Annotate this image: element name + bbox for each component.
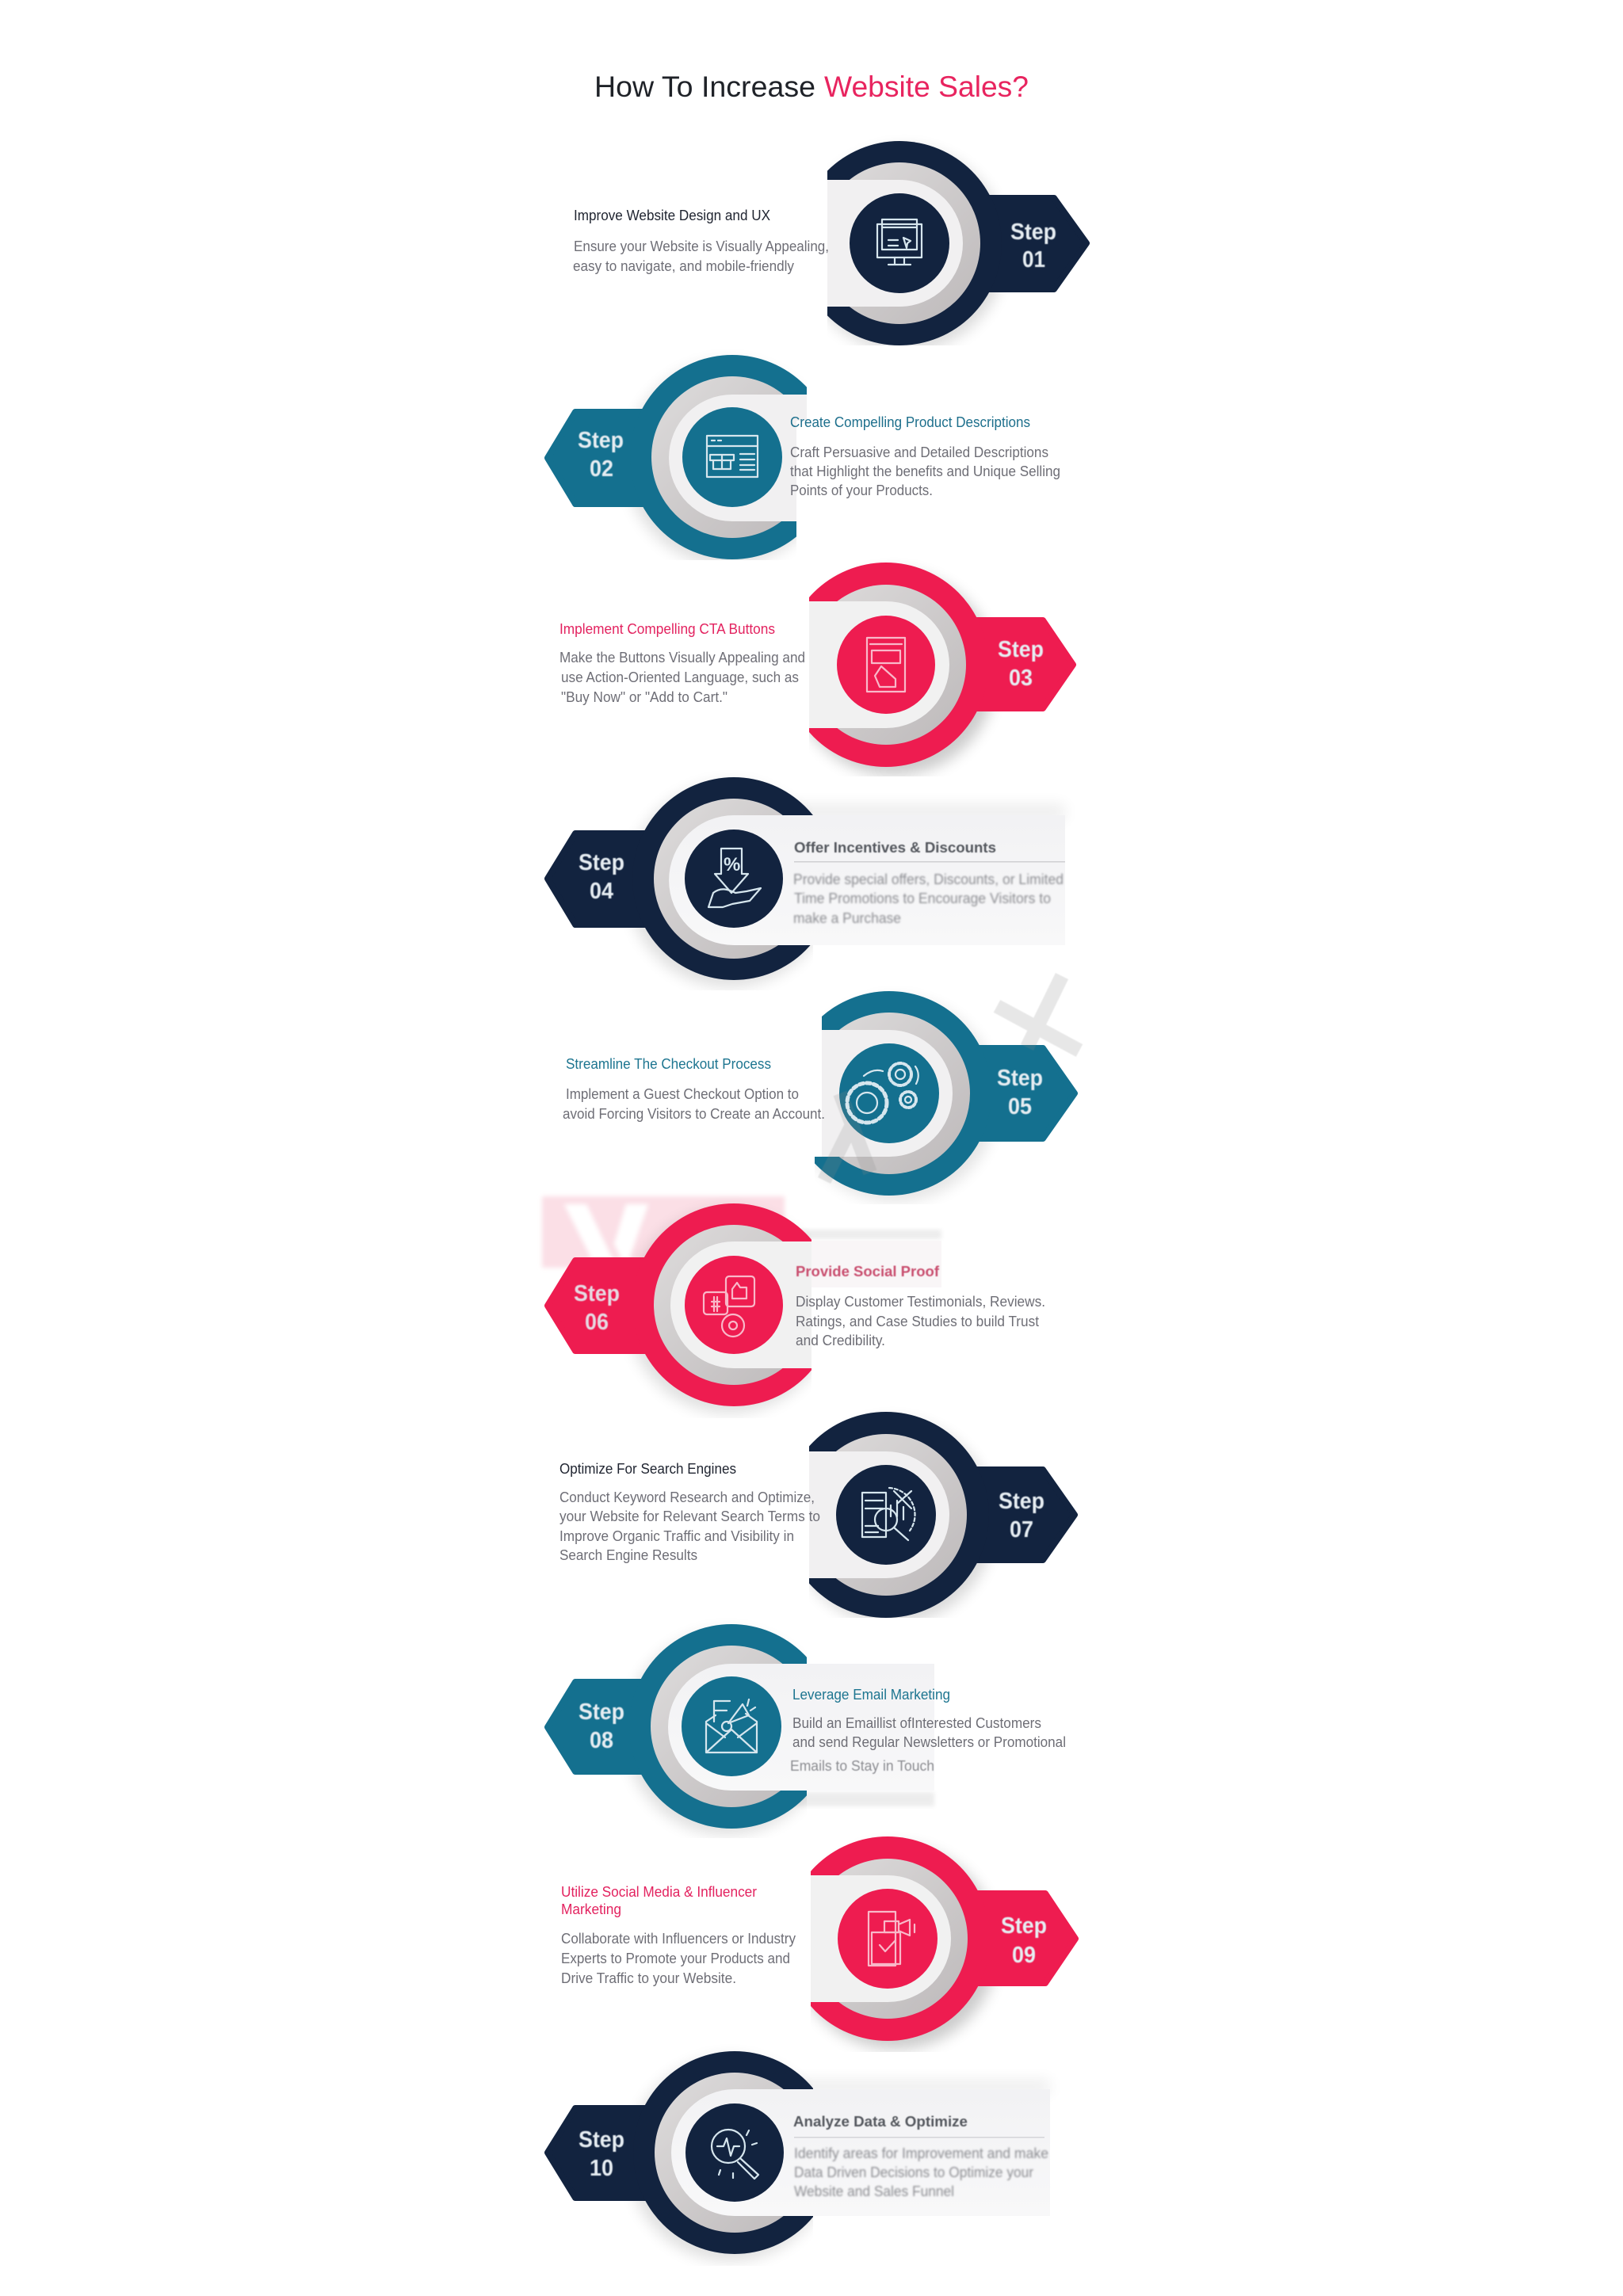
panel: step 05 (563, 976, 1079, 1202)
body text: that Highlight the benefits and Unique Selling (790, 463, 1060, 479)
icon: click button (867, 638, 905, 692)
icon: product page (707, 436, 758, 477)
body text: Craft Persuasive and Detailed Descriptions (790, 444, 1048, 460)
watermark: grey X strokes (824, 976, 1079, 1180)
body text (794, 2145, 1048, 2199)
body text (790, 444, 1060, 498)
panel backdrop shadow (785, 804, 1065, 820)
step label: 04 (590, 879, 613, 904)
body text (796, 1294, 1045, 1348)
body text: and send Regular Newsletters or Promotional (792, 1734, 1066, 1750)
body text: your Website for Relevant Search Terms to (559, 1508, 820, 1524)
icon: social bubbles (704, 1276, 754, 1337)
step label: 01 (1022, 247, 1045, 273)
body text: Collaborate with Influencers or Industry (561, 1931, 796, 1947)
step label: 03 (1009, 666, 1033, 691)
heading: Analyze Data & Optimize (793, 2114, 968, 2130)
panel backdrop shadow (785, 2080, 1050, 2094)
step label (999, 1489, 1044, 1543)
step label (579, 1699, 624, 1753)
step label: Step (998, 637, 1044, 662)
step label: 10 (590, 2156, 613, 2181)
heading: Improve Website Design and UX (574, 208, 770, 223)
icon: email marketing (706, 1699, 757, 1753)
badge: step 03 ring and tag (784, 563, 1073, 776)
step label: 09 (1012, 1943, 1036, 1968)
icon: SEO analysis (862, 1488, 915, 1540)
badge: step 10 ring and tag (548, 2051, 836, 2261)
step label: Step (997, 1066, 1043, 1091)
title: Website Sales? (824, 71, 1029, 103)
badge: step 07 ring and tag (809, 1412, 1078, 1618)
body text (561, 1931, 796, 1986)
step label: 05 (1008, 1094, 1032, 1119)
body text: Drive Traffic to your Website. (561, 1970, 736, 1986)
badge: step 01 ring and tag (827, 141, 1090, 345)
icon: discount in hand (708, 849, 761, 907)
panel: step 09 (561, 1836, 1075, 2050)
icon: analysis magnifier (712, 2130, 758, 2179)
step label (574, 1281, 620, 1335)
badge: step 08 ring and tag (548, 1624, 834, 1835)
body text: Emails to Stay in Touch (790, 1758, 934, 1774)
body text (573, 238, 829, 274)
body text: Search Engine Results (559, 1547, 697, 1563)
step label: 02 (590, 456, 613, 482)
heading: Streamline The Checkout Process (566, 1056, 771, 1072)
heading (561, 1884, 757, 1917)
body text: Data Driven Decisions to Optimize your (794, 2164, 1033, 2180)
heading: Create Compelling Product Descriptions (790, 414, 1030, 430)
body text (559, 1489, 820, 1563)
badge: step 09 ring and tag (785, 1836, 1075, 2050)
icon: website monitor (877, 219, 922, 265)
body text: Website and Sales Funnel (794, 2183, 954, 2199)
badge: step 05 ring and tag (787, 991, 1075, 1202)
heading: Optimize For Search Engines (559, 1461, 736, 1477)
step label (579, 850, 624, 904)
body text: and Credibility. (796, 1333, 885, 1348)
icon: phone and checklist (869, 1912, 915, 1966)
panel: step 06 (542, 1196, 1045, 1413)
title (594, 71, 1029, 103)
panel: step 08 (548, 1624, 1066, 1835)
body text: Make the Buttons Visually Appealing and (559, 650, 805, 666)
heading: Provide Social Proof (796, 1264, 940, 1280)
body text: make a Purchase (793, 910, 901, 926)
step label (997, 1066, 1043, 1119)
body text: Points of your Products. (790, 482, 933, 498)
body text: Provide special offers, Discounts, or Limited (793, 871, 1064, 887)
watermark: pink background (542, 1196, 785, 1268)
body text: "Buy Now" or "Add to Cart." (561, 689, 727, 705)
step label: Step (574, 1281, 620, 1306)
step label: 06 (585, 1310, 609, 1335)
step label: Step (999, 1489, 1044, 1514)
step label (998, 637, 1044, 691)
body text: Experts to Promote your Products and (561, 1951, 790, 1966)
heading: Offer Incentives & Discounts (794, 840, 996, 856)
body text: easy to navigate, and mobile-friendly (573, 258, 794, 274)
panel: step 02 (548, 355, 1060, 566)
info panel (668, 1664, 934, 1791)
body text: Ensure your Website is Visually Appealing, (574, 238, 829, 254)
step label: Step (1001, 1913, 1047, 1939)
info panel with header (671, 2089, 1050, 2216)
step label: 08 (590, 1728, 613, 1753)
body text (790, 1715, 1066, 1774)
panel bottom shadow (792, 1792, 934, 1806)
step label (1001, 1913, 1047, 1968)
body text: use Action-Oriented Language, such as (561, 669, 799, 685)
body text: Display Customer Testimonials, Reviews. (796, 1294, 1045, 1310)
panel: step 01 (573, 141, 1086, 352)
body text: Conduct Keyword Research and Optimize, (559, 1489, 815, 1505)
step label: Step (579, 1699, 624, 1725)
body text: Implement a Guest Checkout Option to (566, 1086, 799, 1102)
body text (559, 650, 805, 705)
step label (1010, 219, 1056, 273)
body text: Build an Emaillist ofInterested Customers (792, 1715, 1041, 1731)
panel: step 03 (559, 563, 1073, 776)
step label (579, 2127, 624, 2181)
heading: Utilize Social Media & Influencer (561, 1884, 757, 1900)
panel header band (785, 1230, 941, 1287)
body text: Ratings, and Case Studies to build Trust (796, 1314, 1039, 1329)
body text: Improve Organic Traffic and Visibility in (559, 1528, 794, 1544)
body text: Identify areas for Improvement and make (794, 2145, 1048, 2161)
title: How To Increase (594, 71, 815, 103)
step label: 07 (1010, 1517, 1033, 1543)
step label (578, 428, 624, 482)
step label: Step (579, 2127, 624, 2153)
badge: step 06 ring and tag (548, 1203, 835, 1413)
icon: gears (847, 1063, 918, 1123)
body text: avoid Forcing Visitors to Create an Account. (563, 1106, 825, 1122)
body text (563, 1086, 825, 1122)
badge: step 04 ring and tag (548, 777, 835, 987)
heading: Marketing (561, 1901, 621, 1917)
step label: Step (579, 850, 624, 875)
icon: discount in hand: % (724, 854, 740, 875)
panel: step 07 (559, 1412, 1075, 1624)
panel: step 10 (548, 2051, 1050, 2261)
badge: step 02 ring and tag (544, 355, 807, 560)
panel: step 04 (548, 777, 1065, 987)
info panel with header (669, 815, 1065, 945)
step label: Step (578, 428, 624, 453)
body text: Time Promotions to Encourage Visitors to (794, 891, 1051, 906)
body text (793, 871, 1064, 926)
heading: Implement Compelling CTA Buttons (559, 621, 775, 637)
step label: Step (1010, 219, 1056, 245)
heading: Leverage Email Marketing (792, 1687, 950, 1703)
